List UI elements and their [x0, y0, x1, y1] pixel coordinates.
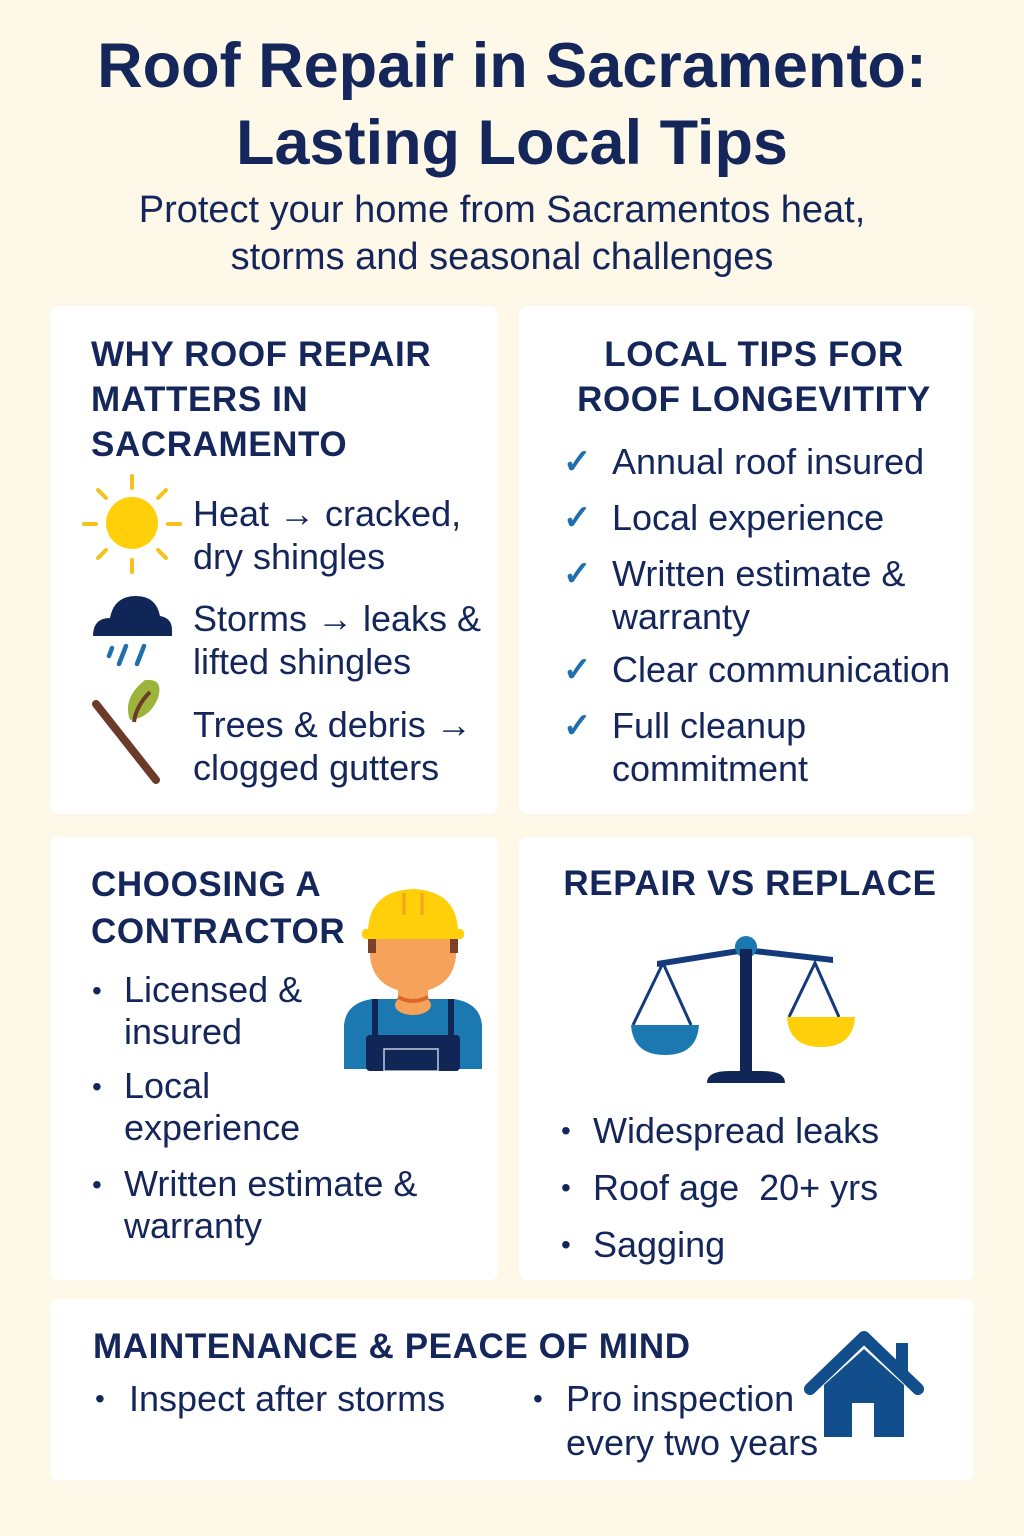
icon: house	[804, 1331, 924, 1437]
subtitle	[139, 189, 865, 278]
panel: choosing a contractor	[50, 837, 498, 1280]
panel: why roof repair matters	[50, 306, 498, 814]
checklist: Full cleanup	[612, 705, 806, 746]
bullet: pro inspection: •	[533, 1383, 543, 1414]
bullets: contractor: warranty	[124, 1205, 262, 1246]
bullet: pro inspection: Pro inspection	[566, 1378, 794, 1419]
text: trees: clogged gutters	[193, 747, 439, 788]
text: storms: Storms → leaks &	[193, 598, 481, 639]
bullets: contractor: Local	[124, 1065, 210, 1106]
bullet: inspect: Inspect after storms	[129, 1378, 445, 1419]
checklist: Local experience	[612, 497, 884, 538]
bullets: repair vs replace: •	[561, 1115, 571, 1146]
icon: branch	[92, 680, 160, 784]
text: heat	[193, 493, 461, 577]
heading: local tips: ROOF LONGEVITITY	[577, 380, 931, 419]
subtitle: Protect your home from Sacramentos heat,	[139, 189, 865, 231]
bullet: inspect: •	[95, 1383, 105, 1414]
checklist: Clear communication	[612, 649, 950, 690]
checklist: ✓	[563, 443, 592, 481]
title	[97, 31, 927, 178]
heading: why: MATTERS IN	[91, 380, 308, 419]
text: heat: Heat → cracked,	[193, 493, 461, 534]
bullet: pro inspection	[533, 1378, 818, 1463]
bullets: contractor: insured	[124, 1011, 242, 1052]
bullets: repair vs replace: •	[561, 1229, 571, 1260]
heading: local tips	[577, 335, 931, 419]
subtitle: storms and seasonal challenges	[231, 236, 773, 278]
text: trees	[193, 704, 472, 788]
title: Roof Repair in Sacramento:	[97, 31, 927, 101]
checklist: commitment	[612, 748, 808, 789]
text: storms: lifted shingles	[193, 641, 411, 682]
bullets: contractor: •	[92, 975, 102, 1006]
icon: sun	[82, 474, 182, 574]
icon: worker	[344, 889, 482, 1071]
panel: maintenance	[50, 1299, 974, 1480]
checklist: ✓	[563, 707, 592, 745]
checklist: ✓	[563, 555, 592, 593]
text: storms	[193, 598, 481, 682]
text: heat: dry shingles	[193, 536, 385, 577]
checklist: Annual roof insured	[612, 441, 924, 482]
heading: why	[91, 335, 431, 464]
heading: contractor: CHOOSING A	[91, 865, 321, 904]
checklist: ✓	[563, 651, 592, 689]
heading: maintenance: MAINTENANCE & PEACE OF MIND	[93, 1327, 691, 1366]
title: Lasting Local Tips	[236, 108, 788, 178]
checklist	[563, 441, 950, 789]
heading: contractor	[91, 865, 345, 951]
bullets: repair vs replace: Roof age 20+ yrs	[593, 1167, 878, 1208]
bullets: repair vs replace	[561, 1110, 879, 1265]
bullet: pro inspection: every two years	[566, 1422, 818, 1463]
heading: repair vs replace: REPAIR VS REPLACE	[563, 864, 937, 903]
heading: why: SACRAMENTO	[91, 425, 347, 464]
heading: local tips: LOCAL TIPS FOR	[604, 335, 904, 374]
checklist: warranty	[612, 596, 750, 637]
checklist: ✓	[563, 499, 592, 537]
bullets: contractor: experience	[124, 1107, 300, 1148]
bullets: contractor: •	[92, 1071, 102, 1102]
bullets: contractor: Licensed &	[124, 969, 302, 1010]
icon: scales	[631, 936, 855, 1083]
bullets: repair vs replace: •	[561, 1172, 571, 1203]
checklist: Written estimate &	[612, 553, 905, 594]
bullets: repair vs replace: Widespread leaks	[593, 1110, 879, 1151]
text: trees: Trees & debris →	[193, 704, 472, 745]
bullets: repair vs replace: Sagging	[593, 1224, 725, 1265]
panel: repair vs replace	[519, 837, 974, 1280]
heading: contractor: CONTRACTOR	[91, 912, 345, 951]
bullets: contractor: Written estimate &	[124, 1163, 417, 1204]
bullets: contractor: •	[92, 1169, 102, 1200]
heading: why: WHY ROOF REPAIR	[91, 335, 431, 374]
panel: local tips	[519, 306, 974, 814]
icon: storm cloud	[93, 596, 172, 666]
bullets: contractor	[92, 969, 417, 1246]
